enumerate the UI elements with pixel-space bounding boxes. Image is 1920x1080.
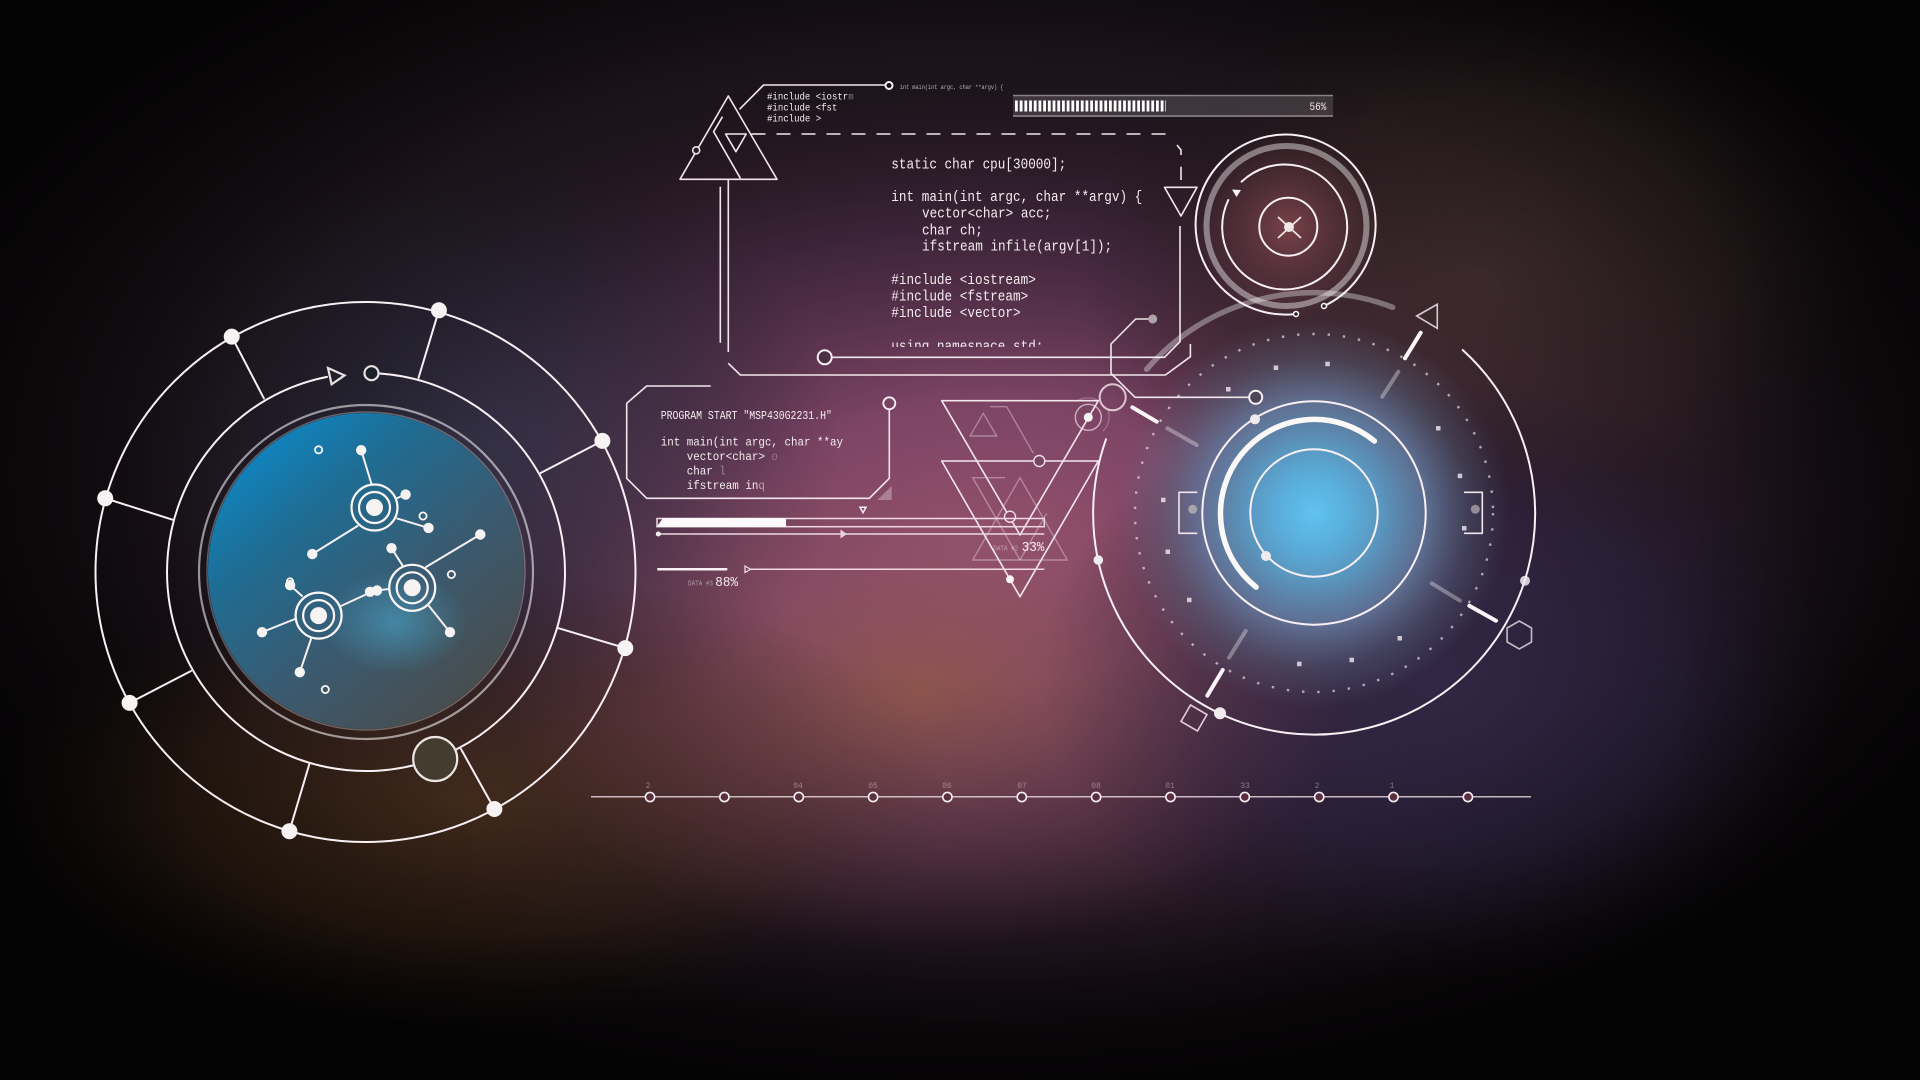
small include code: #include <fst: [767, 102, 837, 114]
progress bar 56%: [1013, 95, 1333, 117]
overlapping triangle schematic: [942, 384, 1126, 597]
inner triangle: [726, 134, 746, 152]
right bracket dot: [1471, 505, 1480, 514]
middle ring: [1202, 401, 1426, 625]
progress bars: [656, 507, 1044, 590]
thick ring: [1206, 146, 1366, 306]
DATA 02 label: DATA #2: [993, 545, 1018, 552]
faded bracket lower: [973, 478, 1020, 560]
panel code: PROGRAM START "MSP430G2231.H": [661, 410, 832, 423]
tiny signature text: int main(int argc, char **argv) {: [900, 84, 1003, 91]
progress bar 56%: 56%: [1310, 102, 1327, 114]
frame corner dash: [1180, 167, 1182, 180]
target dial top right: [1196, 135, 1376, 316]
panel code: ifstream inq: [687, 480, 765, 493]
dashed top line: [752, 133, 1169, 135]
main code listing: #include <vector>: [891, 306, 1021, 322]
vertical rails: [720, 179, 728, 352]
bar track: [657, 518, 1044, 527]
main code listing: #include <fstream>: [891, 290, 1028, 306]
panel code: char l: [687, 465, 726, 478]
centre dot: [1284, 222, 1294, 232]
molecule hub 1: [352, 484, 398, 530]
main triangle: [680, 96, 777, 179]
lens disc: [199, 405, 533, 739]
main code listing: char ch;: [922, 224, 983, 240]
panel code: [661, 410, 843, 493]
frame ring: [818, 350, 832, 364]
program code panel: [627, 386, 895, 500]
timeline labels: 2: [646, 782, 651, 791]
small faded triangle: [970, 413, 997, 436]
timeline labels: 04: [793, 782, 803, 791]
small include code: #include <iostrm: [767, 91, 854, 103]
timeline labels: 07: [1017, 782, 1027, 791]
corner triangle: [877, 486, 892, 500]
connector polyline: [1111, 319, 1250, 397]
timeline labels: 08: [1091, 782, 1101, 791]
dotted ring: [1135, 334, 1493, 692]
bottom frame line: [728, 344, 1190, 375]
diamond marker: [1181, 705, 1207, 731]
slider line two: [657, 566, 1044, 572]
large faded triangle: [973, 478, 1067, 560]
ring nodes: [97, 302, 633, 839]
panel code: vector<char> o: [687, 451, 778, 464]
timeline labels: [646, 782, 1395, 791]
main code listing: #include <iostream>: [891, 273, 1036, 289]
molecule leaves: [257, 445, 485, 677]
arrow marker: [328, 368, 344, 384]
connector to tiny label: [740, 85, 885, 109]
left bracket dot: [1188, 505, 1197, 514]
lower inverted triangle: [942, 461, 1098, 597]
faded bracket: [990, 407, 1033, 453]
triangle node: [693, 147, 700, 154]
main code listing: int main(int argc, char **argv) {: [891, 190, 1142, 206]
faded diagonal: [1020, 513, 1047, 560]
small molecule rings: [287, 446, 455, 693]
spokes: [105, 310, 625, 831]
small include code: #include >: [767, 113, 821, 125]
bar fill: [656, 518, 786, 527]
large ring marker: [413, 737, 457, 781]
cross: [1278, 217, 1301, 238]
timeline labels: 06: [942, 782, 952, 791]
middle frame line: [832, 226, 1180, 357]
timeline labels: 2: [1315, 782, 1320, 791]
panel code: int main(int argc, char **ay: [661, 436, 843, 450]
pointer triangle: [1232, 190, 1241, 197]
connector ring: [1100, 384, 1126, 410]
square markers: [1161, 362, 1466, 666]
molecule links: [262, 450, 480, 672]
panel ring: [883, 397, 895, 409]
top-left triangle emblem and circuit frame: [680, 82, 1262, 404]
main code listing: vector<char> acc;: [922, 207, 1051, 223]
inner ring with gap: [167, 373, 565, 771]
main code listing: [891, 158, 1142, 356]
DATA 03 label: DATA #3: [688, 580, 713, 587]
faint sweep arc: [1147, 293, 1393, 369]
left molecular scanner dial: [96, 302, 636, 842]
small triangle marker: [860, 507, 866, 513]
timeline nodes: [645, 792, 1472, 802]
88% value: 88%: [715, 574, 738, 590]
main code listing: ifstream infile(argv[1]);: [922, 240, 1112, 256]
timeline labels: 33: [1240, 782, 1250, 791]
main code listing: using namespace std;: [891, 340, 1043, 356]
triangle rings and node: [1034, 456, 1045, 466]
upper inverted triangle: [942, 401, 1098, 535]
inner ring: [1250, 449, 1378, 577]
molecule hub 2: [389, 565, 435, 611]
timeline labels: 01: [1165, 782, 1175, 791]
arc end rings: [1294, 312, 1298, 316]
small ring marker: [364, 366, 378, 380]
small target: [1075, 398, 1109, 431]
connector end ring: [886, 82, 892, 89]
radial dashes: [1132, 333, 1496, 696]
timeline labels: 05: [868, 782, 878, 791]
ring nodes: [1094, 414, 1530, 719]
hexagon marker: [1507, 621, 1532, 649]
outer arc: [1196, 135, 1376, 315]
triangle marker: [1417, 304, 1437, 328]
connector end ring: [1249, 391, 1262, 404]
main code listing: static char cpu[30000];: [891, 158, 1066, 174]
thick progress arc: [1220, 419, 1374, 587]
inverted triangle: [1164, 187, 1197, 216]
inner ring: [1259, 198, 1317, 256]
timeline: [591, 782, 1531, 802]
slider line one: [656, 530, 1044, 538]
frame corner: [1177, 145, 1181, 155]
right radar dial: [1093, 293, 1535, 735]
small include code: [767, 91, 854, 125]
middle ring: [1222, 164, 1347, 289]
inner bracket: [714, 117, 740, 178]
outer ring: [96, 302, 636, 842]
left bracket: [1179, 492, 1197, 533]
outer arc: [1093, 350, 1535, 735]
timeline labels: 1: [1390, 782, 1395, 791]
right bracket: [1464, 492, 1482, 533]
panel outline: [627, 386, 889, 498]
33% value: 33%: [1022, 539, 1044, 555]
molecule hub 3: [296, 593, 342, 639]
gray node: [1148, 314, 1157, 324]
